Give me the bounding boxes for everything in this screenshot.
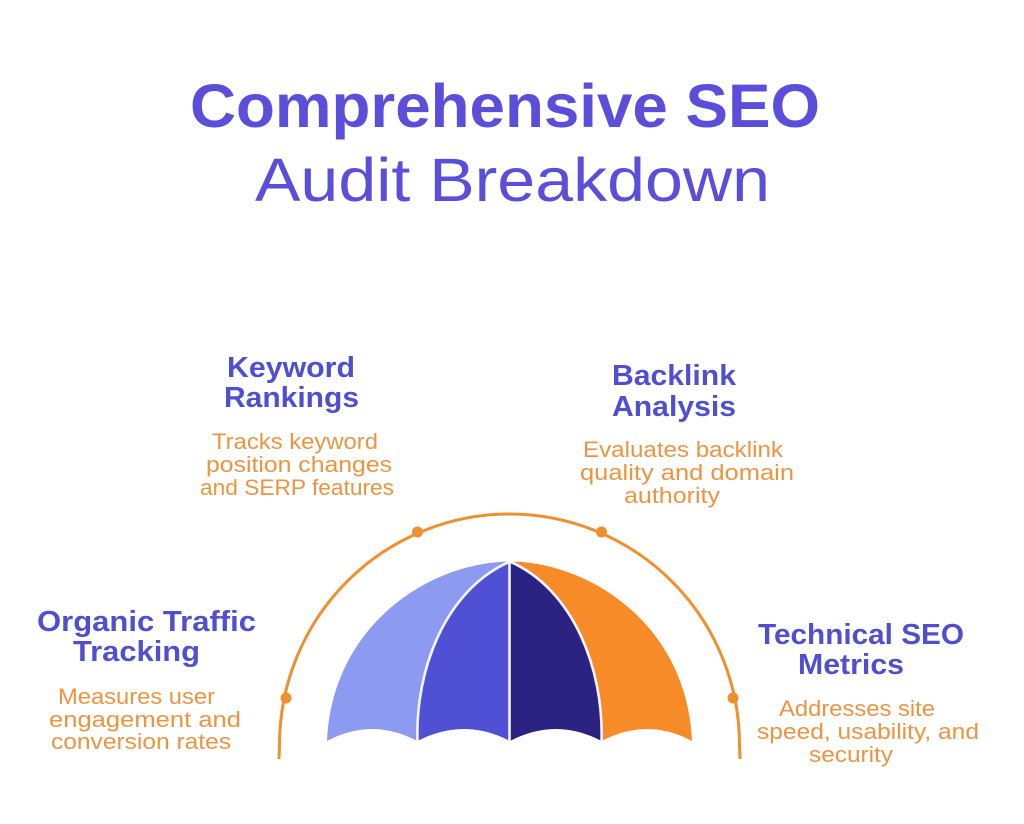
segment: keyword rankings: [417, 562, 510, 741]
title: Audit Breakdown: [255, 146, 770, 214]
text: keyword rankings description: position changes: [206, 452, 392, 477]
text: backlink analysis description: authority: [624, 483, 720, 508]
segment: backlink analysis: [510, 562, 602, 741]
title: [190, 72, 820, 214]
text: technical seo description: Addresses site: [779, 696, 935, 721]
text: organic traffic description: [49, 684, 241, 754]
text: backlink analysis description: Evaluates backlink: [583, 437, 784, 462]
text: technical seo description: security: [809, 742, 893, 767]
text: organic traffic description: engagement and: [49, 707, 241, 732]
umbrella chart: [327, 561, 692, 742]
heading: keyword rankings: Keyword: [227, 352, 355, 384]
text: technical seo description: [757, 696, 979, 767]
text: keyword rankings description: Tracks keyword: [212, 429, 378, 454]
text: organic traffic description: Measures user: [58, 684, 215, 709]
panel: backlink analysis: [580, 360, 794, 508]
text: backlink analysis description: [580, 437, 794, 508]
text: keyword rankings description: [200, 429, 394, 500]
heading: technical seo metrics: Technical SEO: [758, 619, 964, 651]
segment: organic traffic: [327, 562, 510, 741]
heading: organic traffic tracking: Tracking: [73, 636, 200, 668]
heading: organic traffic tracking: [37, 606, 256, 668]
heading: technical seo metrics: Metrics: [798, 649, 904, 681]
text: organic traffic description: conversion rates: [51, 729, 231, 754]
text: keyword rankings description: and SERP features: [200, 475, 394, 500]
panel: technical seo metrics: [757, 619, 979, 767]
heading: technical seo metrics: [758, 619, 964, 681]
heading: backlink analysis: Analysis: [612, 391, 736, 423]
heading: organic traffic tracking: Organic Traffic: [37, 606, 256, 638]
heading: keyword rankings: Rankings: [224, 382, 359, 414]
title: Comprehensive SEO: [190, 72, 820, 140]
heading: backlink analysis: [612, 360, 737, 423]
segment: technical seo: [510, 562, 692, 741]
panel: organic traffic tracking: [37, 606, 256, 754]
arc with connector dots: [279, 514, 740, 759]
panel: keyword rankings: [200, 352, 394, 500]
text: technical seo description: speed, usability, and: [757, 719, 979, 744]
text: backlink analysis description: quality and domain: [580, 460, 794, 485]
rib lines: [417, 561, 602, 742]
heading: keyword rankings: [224, 352, 359, 414]
heading: backlink analysis: Backlink: [612, 360, 737, 392]
